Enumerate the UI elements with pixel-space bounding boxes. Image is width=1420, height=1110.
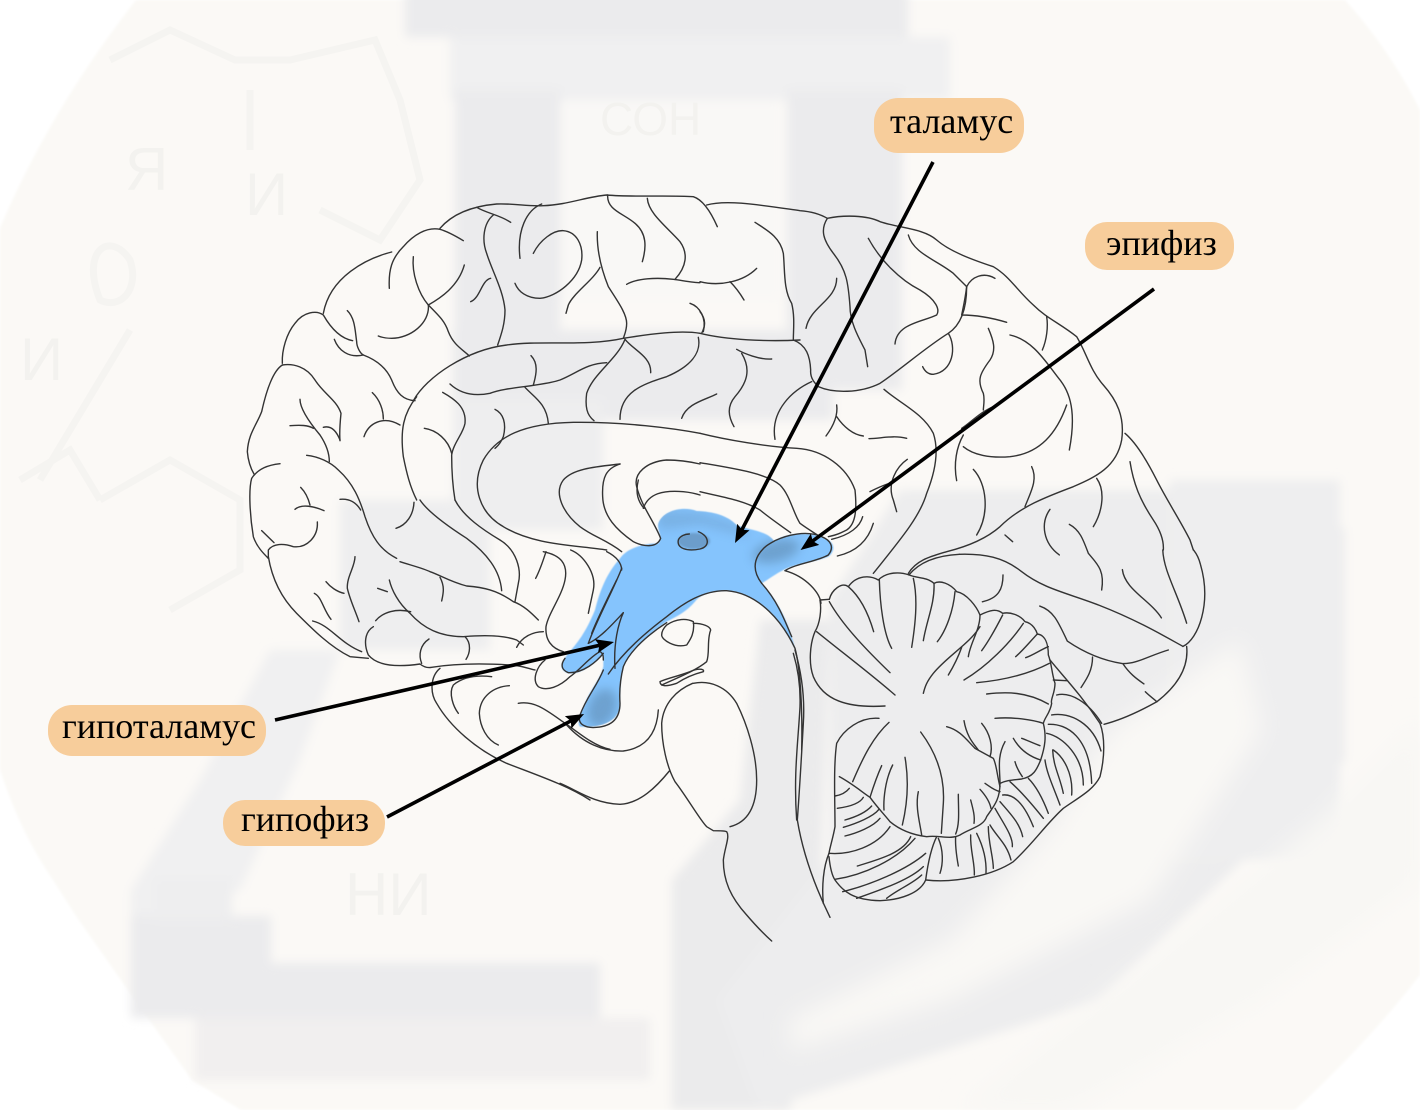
background watermark: И bbox=[20, 326, 63, 393]
label: hypothalamus: гипоталамус bbox=[62, 706, 256, 746]
label: pituitary gland bbox=[223, 799, 385, 846]
label: pituitary gland: гипофиз bbox=[241, 799, 369, 839]
arrow: thalamus bbox=[739, 162, 933, 536]
central structures outlines bbox=[562, 480, 831, 750]
background watermark: НИ bbox=[345, 861, 431, 928]
background watermark: СОН bbox=[600, 93, 701, 145]
label: hypothalamus bbox=[48, 705, 266, 756]
brain line drawing bbox=[247, 195, 1205, 941]
background watermark: И bbox=[245, 161, 288, 228]
label: pineal gland: эпифиз bbox=[1106, 223, 1217, 263]
temporal lobe bbox=[909, 550, 1205, 724]
background watermark: Я bbox=[125, 136, 168, 203]
arrow: pituitary gland bbox=[387, 718, 577, 817]
cerebellum bbox=[810, 573, 1104, 903]
arrow: hypothalamus bbox=[275, 644, 606, 720]
label: thalamus: таламус bbox=[890, 101, 1013, 141]
brainstem and spinal cord bbox=[560, 650, 830, 941]
lower frontal lobe and temporal pole bbox=[268, 500, 610, 800]
label: pineal gland bbox=[1085, 222, 1234, 270]
cortex outline and folds, parietal part bbox=[700, 203, 1193, 590]
shaded areas of blue region bbox=[581, 510, 802, 732]
cortex outline and folds, frontal part bbox=[247, 195, 717, 558]
blue hypothalamic region bbox=[562, 509, 833, 732]
arrow: pineal gland bbox=[807, 289, 1154, 545]
label: thalamus bbox=[874, 98, 1024, 153]
